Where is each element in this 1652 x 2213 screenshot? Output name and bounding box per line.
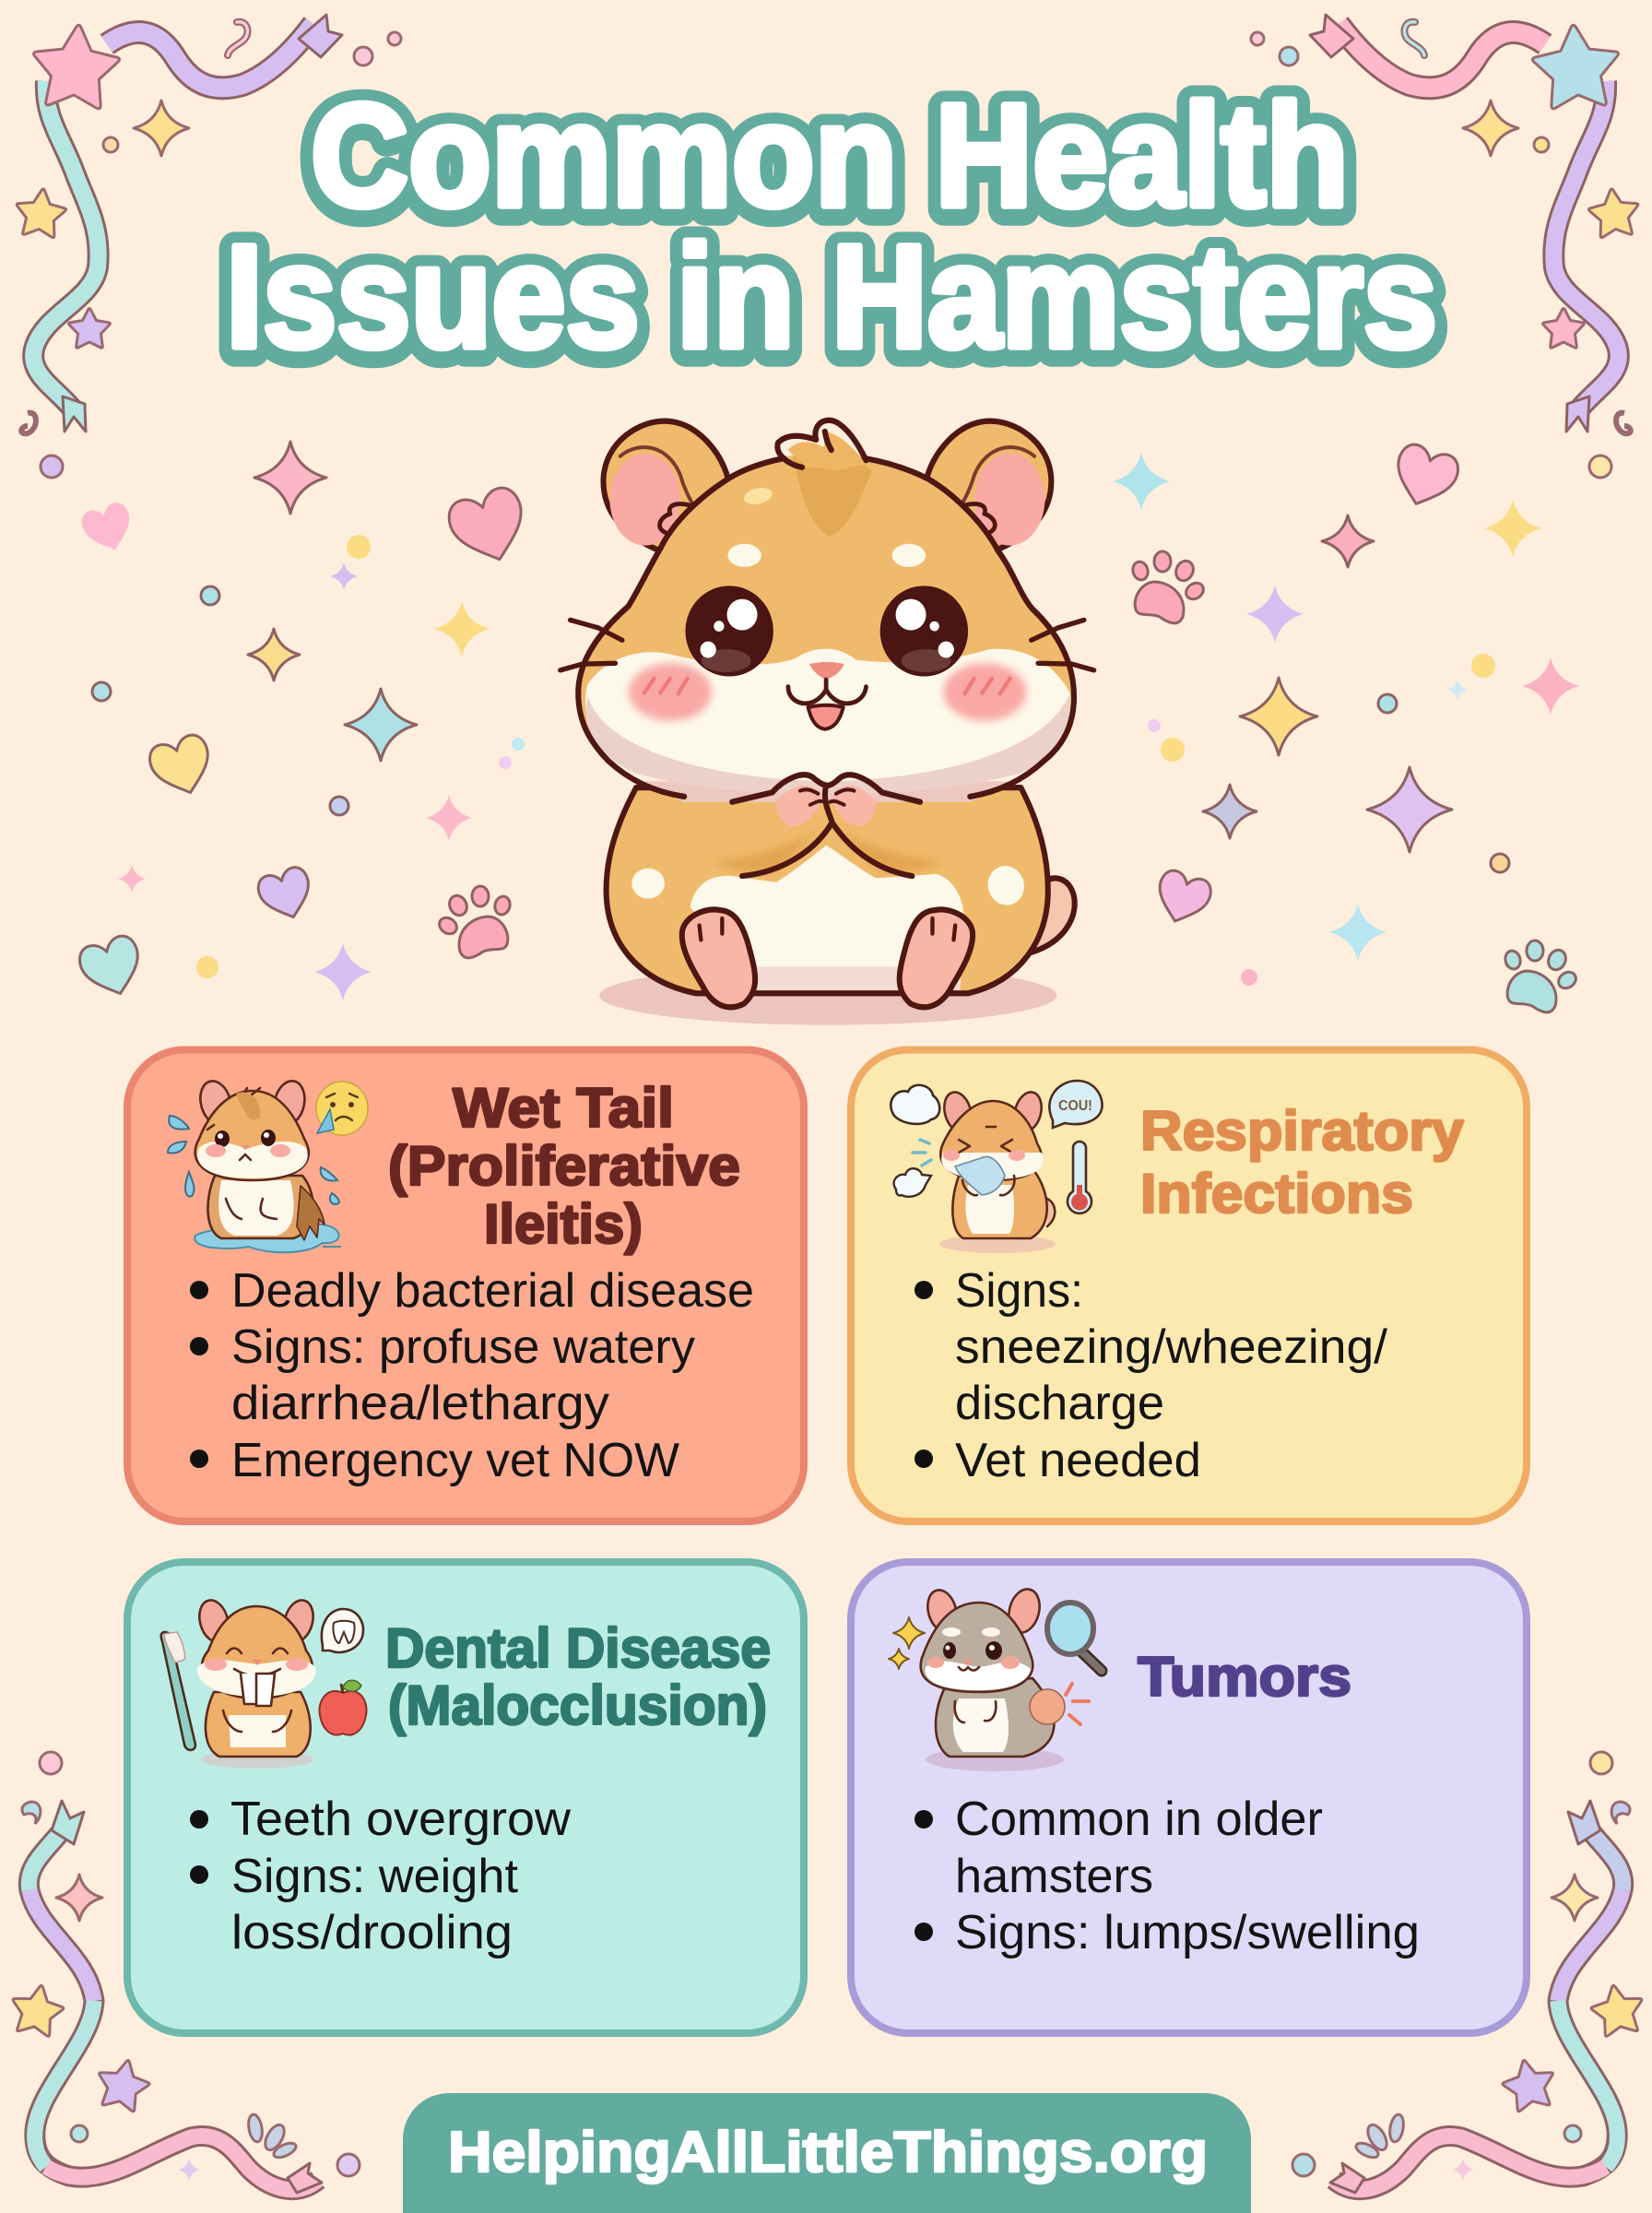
website text: HelpingAllLittleThings.org <box>448 2121 1208 2184</box>
hands and arms <box>732 775 920 876</box>
star: pink <box>1543 308 1584 348</box>
right foot <box>900 909 973 1007</box>
footer banner <box>403 2093 1251 2213</box>
bullet list: Deadly bacterial disease <box>231 1264 754 1318</box>
bullet list <box>190 1264 754 1487</box>
icon: small cloud <box>894 1168 931 1197</box>
bullet list: Common in older <box>955 1793 1323 1846</box>
icon: thermometer <box>1068 1142 1092 1213</box>
whiskers <box>560 620 1094 670</box>
forehead highlight <box>742 485 773 507</box>
star: yellow <box>14 186 68 239</box>
ribbon: lavender top <box>107 15 342 88</box>
hearts <box>76 483 534 1002</box>
card background <box>127 1562 804 2033</box>
star: pink <box>30 22 122 110</box>
head fill <box>578 452 1074 794</box>
nose <box>809 662 844 680</box>
forehead spots <box>727 544 926 567</box>
main hamster illustration <box>560 420 1094 1025</box>
ribbon <box>29 1801 322 2193</box>
icon: crying emoji <box>316 1082 368 1135</box>
bullet list: Signs: <box>955 1264 1083 1318</box>
icon: sneeze cloud <box>891 1085 939 1124</box>
decorative corner: top left <box>14 15 401 478</box>
panel: tumors <box>851 1562 1527 2033</box>
icon: pain marks <box>1066 1684 1089 1724</box>
panel: respiratory infections <box>851 1049 1527 1521</box>
body spots <box>631 860 1030 910</box>
bullet list: Signs: lumps/swelling <box>955 1906 1420 1959</box>
ribbon <box>1330 1801 1623 2193</box>
star: lavender <box>1499 2055 1559 2113</box>
outlined sparkles <box>248 442 417 761</box>
bullet list: hamsters <box>955 1850 1153 1903</box>
bullet list: diarrhea/lethargy <box>231 1377 609 1430</box>
white cheeks and muzzle <box>585 649 1070 794</box>
head stripe <box>792 442 872 537</box>
heading <box>1140 1100 1465 1225</box>
arm shading <box>713 829 944 872</box>
decorative corner: top right <box>1251 15 1641 478</box>
small circles <box>1251 32 1631 478</box>
small circles <box>21 32 401 478</box>
bullet list <box>914 1264 1388 1487</box>
bullet list <box>914 1793 1420 1959</box>
swirl: teal <box>1404 22 1424 55</box>
paw print: teal <box>1504 941 1579 1012</box>
outlined sparkles <box>1203 515 1452 852</box>
panel: wet tail <box>127 1049 804 1521</box>
icon: tooth speech bubble <box>322 1609 363 1652</box>
decorative corner: bottom right <box>1292 1752 1647 2193</box>
blush cheeks <box>629 663 1026 721</box>
sparkle: pink <box>56 1875 102 1921</box>
chest shadow <box>636 781 1020 802</box>
bullet list: Teeth overgrow <box>230 1793 571 1846</box>
heading: Tumors <box>1138 1646 1351 1708</box>
icon: buck-toothed hamster <box>195 1597 317 1769</box>
star: lavender <box>69 308 110 348</box>
bullet list: Vet needed <box>955 1434 1201 1487</box>
dots <box>92 535 525 978</box>
small circles <box>22 1752 360 2176</box>
heading: (Proliferative <box>388 1135 740 1197</box>
ribbon: teal side <box>33 81 99 432</box>
scattered decorations: left of hamster <box>76 442 534 1002</box>
star: lavender <box>93 2055 153 2113</box>
cheek shade <box>585 692 1070 794</box>
head outline <box>578 458 1074 797</box>
ribbon: lavender side <box>1553 81 1619 432</box>
decorative corner: bottom left <box>7 1752 360 2193</box>
paw print: pink <box>1131 551 1207 623</box>
scattered decorations: right of hamster <box>1113 441 1579 1012</box>
card background <box>851 1049 1527 1521</box>
banner shape <box>403 2093 1251 2213</box>
heading: Ileitis) <box>484 1193 643 1255</box>
left foot <box>682 909 755 1007</box>
heading: Dental Disease <box>385 1617 771 1679</box>
icon: sad hamster with puddle <box>195 1078 341 1252</box>
icon: sneeze lines <box>913 1140 931 1166</box>
lower body <box>607 787 1048 993</box>
splash drops <box>247 2113 298 2160</box>
tail <box>1032 878 1075 953</box>
right ear <box>926 421 1051 550</box>
plain sparkles <box>118 562 490 1000</box>
star: yellow <box>7 1981 66 2038</box>
title fill: Issues in Hamsters <box>226 215 1437 378</box>
icon: magnifying glass <box>1047 1603 1102 1671</box>
sparkle: yellow <box>134 101 189 156</box>
swirl: pink <box>228 22 248 55</box>
bullet list: sneezing/wheezing/ <box>955 1320 1388 1374</box>
left ear <box>603 421 728 550</box>
heading: Wet Tail <box>453 1077 674 1139</box>
belly shade <box>756 966 960 990</box>
bullet list: loss/drooling <box>231 1906 513 1959</box>
card background <box>127 1049 804 1521</box>
title fill: Common Health <box>311 74 1349 237</box>
icon: speech bubble <box>1049 1081 1103 1128</box>
title <box>226 74 1437 381</box>
belly <box>690 846 964 990</box>
ground shadow <box>599 965 1056 1025</box>
icon: toothbrush <box>161 1632 195 1750</box>
tongue <box>808 705 844 729</box>
star: blue <box>1530 22 1622 110</box>
heading <box>385 1617 771 1736</box>
icon: water drops <box>168 1116 339 1204</box>
bullet list: Emergency vet NOW <box>231 1434 679 1487</box>
paw print: pink <box>436 886 512 958</box>
icon: speech bubble: COU! <box>1058 1098 1092 1114</box>
icon: gray hamster with lump <box>921 1586 1065 1771</box>
title outline: Common Health <box>311 77 1349 240</box>
mouth <box>788 680 866 704</box>
ribbon: pink top <box>1310 15 1545 88</box>
star: yellow <box>1588 1981 1647 2038</box>
sparkle: yellow <box>1552 1875 1598 1921</box>
sparkle: faint lavender <box>178 2159 200 2181</box>
icon: apple <box>320 1680 367 1735</box>
small circles <box>1292 1752 1630 2176</box>
title outline <box>226 77 1437 381</box>
right eye <box>880 586 968 677</box>
icon: gold sparkles <box>889 1617 925 1669</box>
bullet list: discharge <box>955 1377 1164 1430</box>
heading <box>388 1077 740 1255</box>
bullet list: Signs: profuse watery <box>231 1320 695 1374</box>
dots <box>1148 654 1509 986</box>
plain sparkles <box>1113 453 1579 961</box>
card background <box>851 1562 1527 2033</box>
sparkle: faint pink <box>1452 2159 1474 2181</box>
hearts <box>1150 441 1462 929</box>
star: yellow <box>1587 186 1641 239</box>
bullet list <box>190 1793 571 1959</box>
title fill <box>226 74 1437 378</box>
bullet list: Signs: weight <box>231 1850 519 1903</box>
heading: Respiratory <box>1140 1100 1465 1162</box>
splash drops <box>1354 2113 1405 2160</box>
icon: sneezing hamster <box>939 1089 1056 1253</box>
heading: (Malocclusion) <box>388 1675 767 1736</box>
fur tuft <box>788 432 866 470</box>
left eye <box>685 586 773 677</box>
heading: Infections <box>1140 1163 1413 1225</box>
sparkle: yellow <box>1463 101 1518 156</box>
title outline: Issues in Hamsters <box>226 218 1437 381</box>
panel: dental disease <box>127 1562 804 2033</box>
